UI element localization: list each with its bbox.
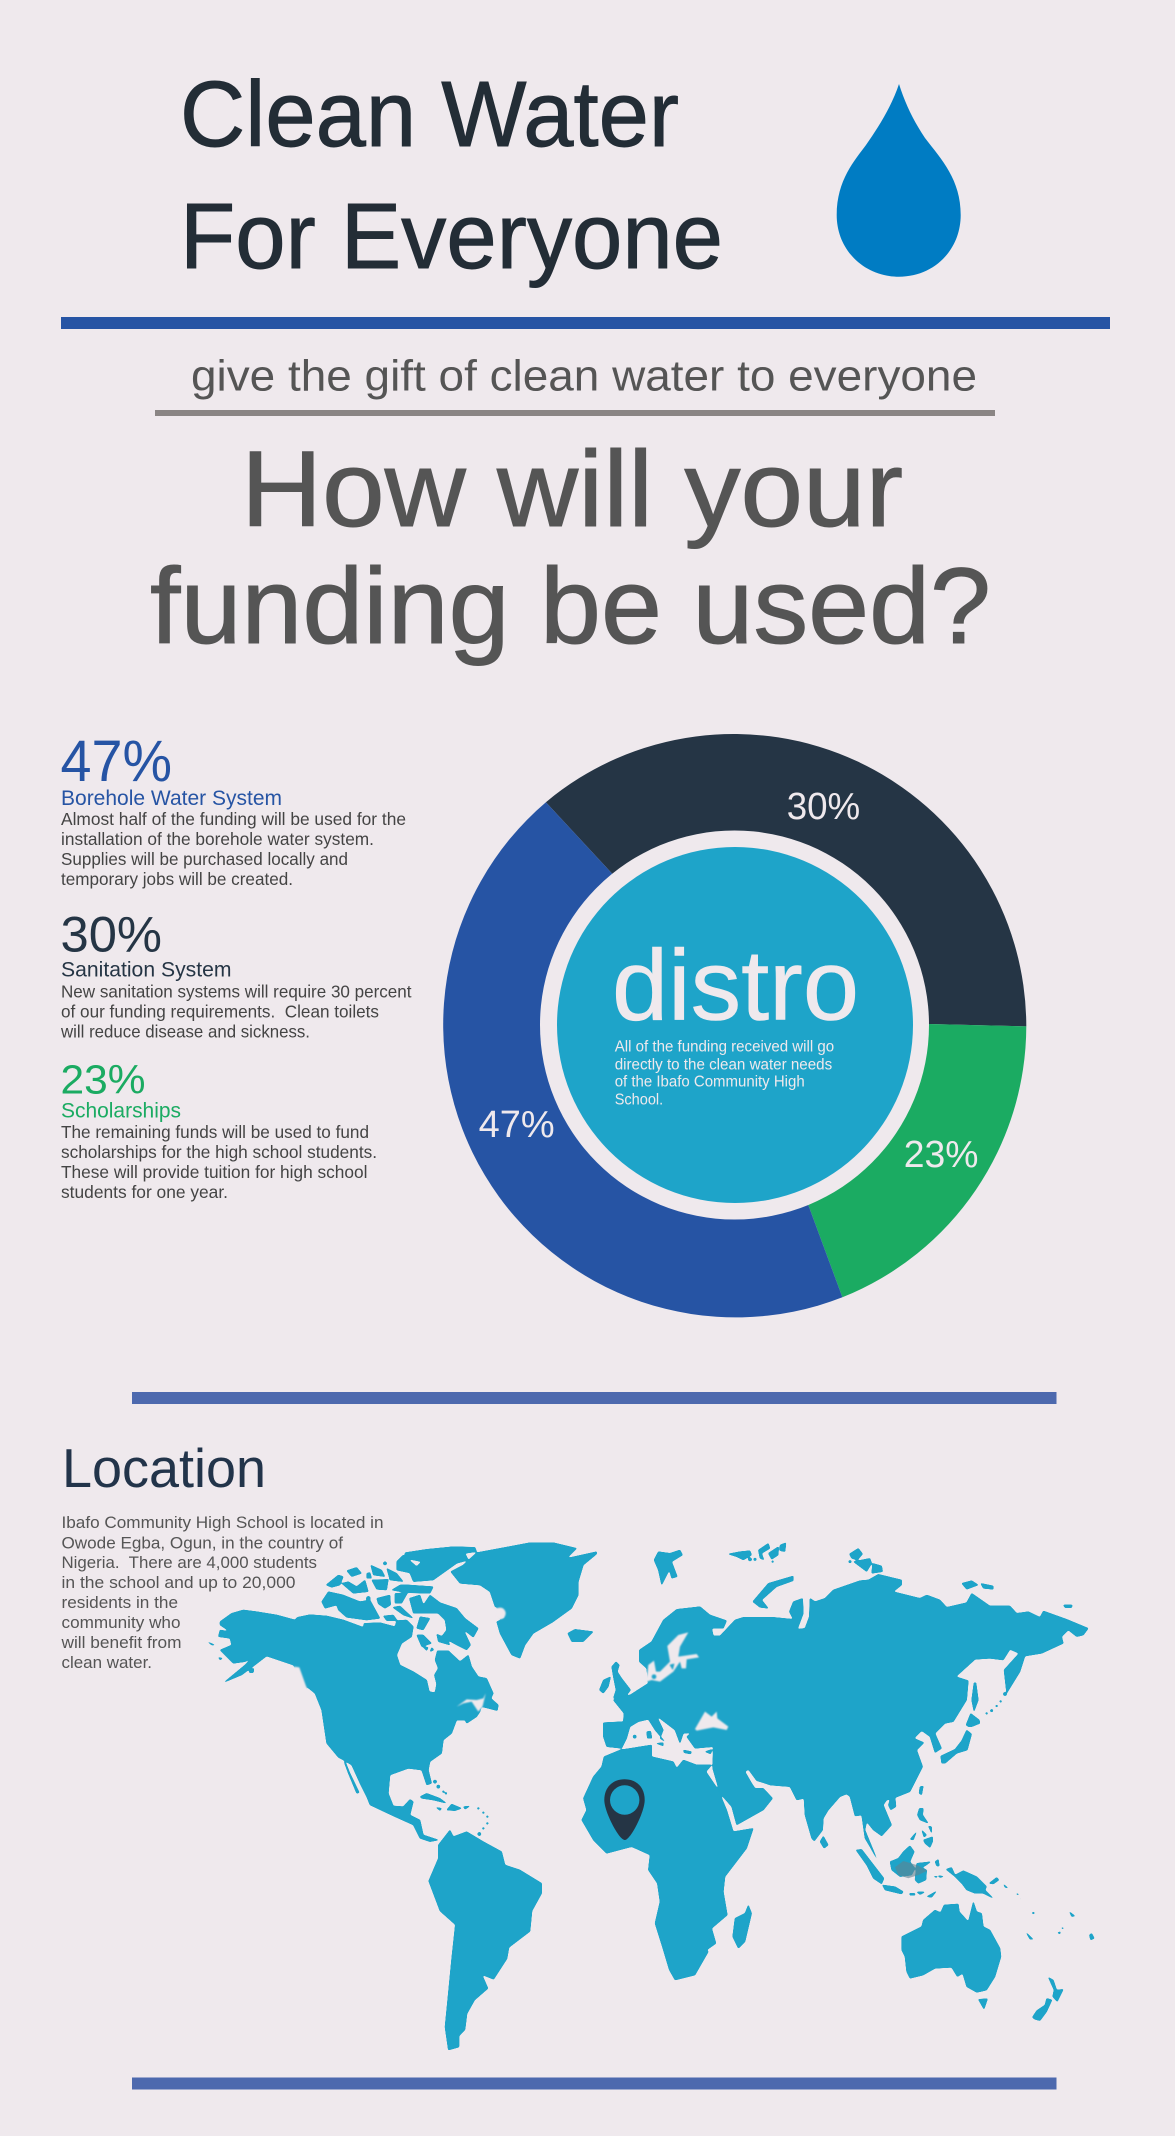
map: Eurasia, Africa and Oceania [582,1543,1094,2021]
section divider bar [132,1392,1056,1404]
donut centre circle [557,847,913,1203]
centre text: School. [615,1091,663,1108]
text block: borehole water system: Supplies will be purchased locally and [61,849,348,869]
label: 47%: 47% [479,1104,555,1146]
text block: scholarships: 23% [60,1056,146,1102]
Madagascar and Sri Lanka [733,1905,752,1948]
Eurasia [603,1574,1088,1860]
centre heading: distro: distro [612,930,859,1042]
location text [60,1513,383,1672]
segment: sanitation 30% [546,734,1026,1026]
text block: scholarships [60,1056,377,1202]
map landmasses [207,1543,1094,2050]
text block: borehole water system: temporary jobs will be created. [61,869,293,889]
Europe and Arctic islands [612,1662,631,1698]
location text: residents in the [62,1593,178,1612]
text block: borehole water system: 47% [60,729,172,794]
text block: sanitation system: New sanitation systems will require 30 percent [61,981,412,1001]
centre text: directly to the clean water needs [615,1056,832,1074]
title: Clean Water [180,62,679,166]
text block: scholarships: Scholarships [61,1099,181,1123]
text block: sanitation system: 30% [60,907,162,963]
location text: Owode Egba, Ogun, in the country of [62,1533,343,1552]
southeast Asia and Oceania [856,1786,1094,2021]
text block: scholarships: scholarships for the high school students. [61,1142,377,1162]
location text: community who [62,1613,180,1632]
location heading: Location [62,1437,266,1499]
location text: will benefit from [60,1633,182,1652]
centre text: All of the funding received will go [615,1038,834,1055]
centre text: of the Ibafo Community High [615,1074,805,1091]
segment: borehole 47% [443,802,842,1317]
seas [695,1712,728,1731]
label: 23%: 23% [904,1134,978,1176]
donut hole [540,830,929,1220]
borneo shadow patch [895,1861,927,1878]
text block: scholarships: students for one year. [61,1182,228,1202]
world map [207,1543,1094,2050]
header divider bar [61,317,1110,329]
title [180,62,723,288]
title: For Everyone [180,184,723,288]
section heading: funding [150,428,991,666]
text block: borehole water system [60,729,406,889]
location text: clean water. [62,1653,152,1672]
text block: scholarships: The remaining funds will be used to fund [61,1122,369,1142]
section heading: funding: funding be used? [150,545,991,666]
Baltic Sea [647,1632,699,1682]
text block: sanitation system: will reduce disease and sickness. [60,1021,310,1041]
label: 30%: 30% [787,786,860,828]
text block: scholarships: These will provide tuition for high school [61,1162,368,1182]
Africa [582,1745,753,1980]
location text: Ibafo Community High School is located in [62,1513,384,1532]
east Asia islands [849,1548,1072,1763]
subtitle underline [155,410,995,416]
text block: sanitation system: of our funding requirements. Clean toilets [61,1001,379,1021]
segment: scholarships 23% [734,1024,1026,1297]
section heading: funding: How will your [241,428,903,549]
map: Americas and Greenland [207,1543,597,2050]
centre text [615,1038,834,1108]
text block: sanitation system [60,907,412,1041]
icon: water drop [837,84,961,277]
text block: sanitation system: Sanitation System [61,958,232,982]
subtitle: give the gift of clean water to everyone [191,352,977,400]
text block: borehole water system: Borehole Water System [61,786,282,810]
text block: borehole water system: installation of the borehole water system. [61,829,374,849]
location text: in the school and up to 20,000 [62,1573,296,1592]
donut chart [443,734,1026,1317]
footer divider bar [132,2078,1056,2090]
location text: Nigeria. There are 4,000 students [62,1553,317,1572]
icon: location pin [604,1779,645,1840]
text block: borehole water system: Almost half of the funding will be used for the [61,809,406,829]
